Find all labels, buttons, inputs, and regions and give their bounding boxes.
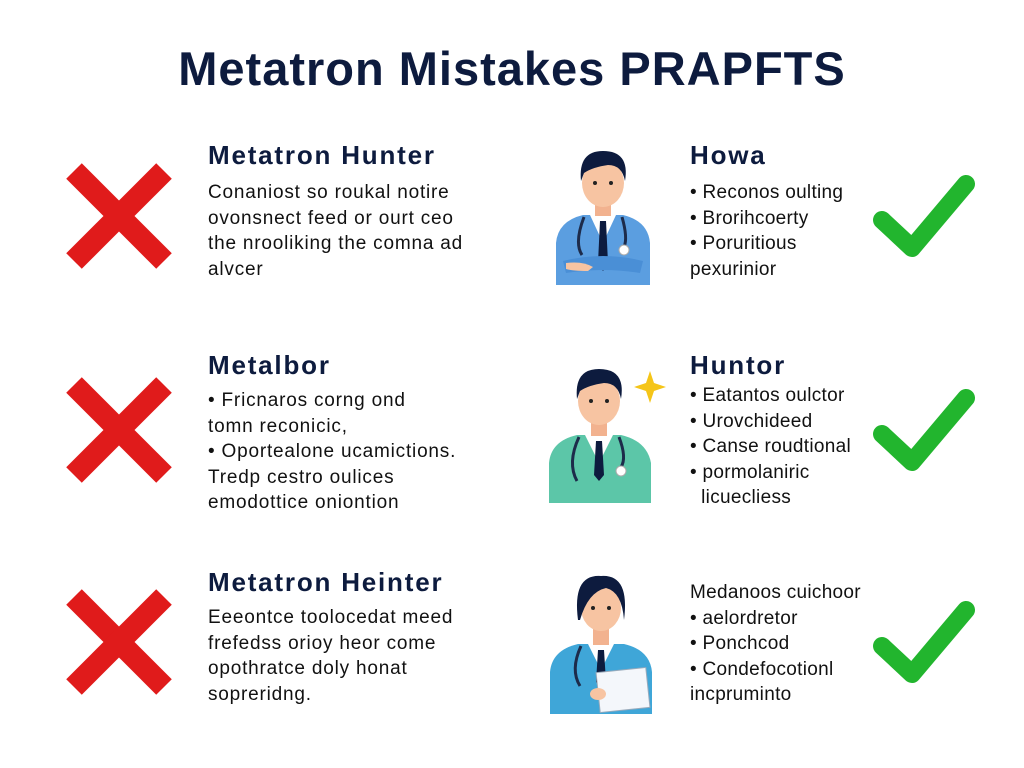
text block: opothratce doly honat <box>208 658 408 679</box>
text block <box>208 182 463 280</box>
text block: • Fricnaros corng ond <box>208 390 406 411</box>
icon: doctor 3 with clipboard <box>550 576 652 714</box>
panel: correct 2 <box>690 350 851 508</box>
icon: green check 1 <box>873 175 975 257</box>
heading: Huntor <box>690 350 786 380</box>
text block: pexurinior <box>690 258 776 280</box>
text block: Conaniost so roukal notire <box>208 182 450 203</box>
text block: • Ponchcod <box>690 633 789 654</box>
icon: green check 3 <box>873 601 975 683</box>
panel: correct 3 <box>690 582 861 705</box>
text block: • Urovchideed <box>690 410 813 432</box>
text block: the nrooliking the comna ad <box>208 233 463 254</box>
text block: Eeeontce toolocedat meed <box>208 607 453 628</box>
text block <box>690 385 851 508</box>
icon: green check 2 <box>873 389 975 471</box>
text block: • Eatantos oulctor <box>690 385 845 406</box>
panel: mistake 3 <box>208 567 453 704</box>
text block <box>690 582 861 705</box>
panel: correct 1 <box>690 140 843 280</box>
title: Metatron Mistakes PRAPFTS <box>178 42 846 95</box>
panel: mistake 2 <box>208 350 456 513</box>
text block: emodottice oniontion <box>208 492 399 513</box>
text block: sopreridng. <box>208 684 312 704</box>
icon: red cross 3 <box>66 589 172 695</box>
text block: • pormolaniric <box>690 462 810 482</box>
icon: red cross 2 <box>66 377 172 483</box>
text block: • aelordretor <box>690 608 798 628</box>
heading: Howa <box>690 140 767 170</box>
text block <box>690 182 843 280</box>
text block: frefedss orioy heor come <box>208 632 436 654</box>
text block: • Condefocotionl <box>690 658 834 680</box>
text block: • Oportealone ucamictions. <box>208 441 456 462</box>
text block <box>208 607 453 704</box>
text block: Tredp cestro oulices <box>208 466 394 488</box>
text block: Medanoos cuichoor <box>690 582 861 603</box>
panel: mistake 1 <box>208 140 463 280</box>
text block: ovonsnect feed or ourt ceo <box>208 208 454 228</box>
icon: doctor 2 with sparkle <box>549 369 666 503</box>
text block: incpruminto <box>690 684 792 705</box>
text block: • Brorihcoerty <box>690 208 809 228</box>
text block: licuecliess <box>701 487 791 508</box>
text block: • Reconos oulting <box>690 182 843 203</box>
text block: alvcer <box>208 258 263 280</box>
icon: doctor 1 <box>556 151 650 285</box>
text block: tomn reconicic, <box>208 416 348 436</box>
heading: Metatron Hunter <box>208 140 436 170</box>
text block <box>208 390 456 513</box>
heading: Metalbor <box>208 350 331 380</box>
icon: red cross 1 <box>66 163 172 269</box>
text block: • Canse roudtional <box>690 436 851 457</box>
heading: Metatron Heinter <box>208 567 443 597</box>
text block: • Poruritious <box>690 233 797 254</box>
